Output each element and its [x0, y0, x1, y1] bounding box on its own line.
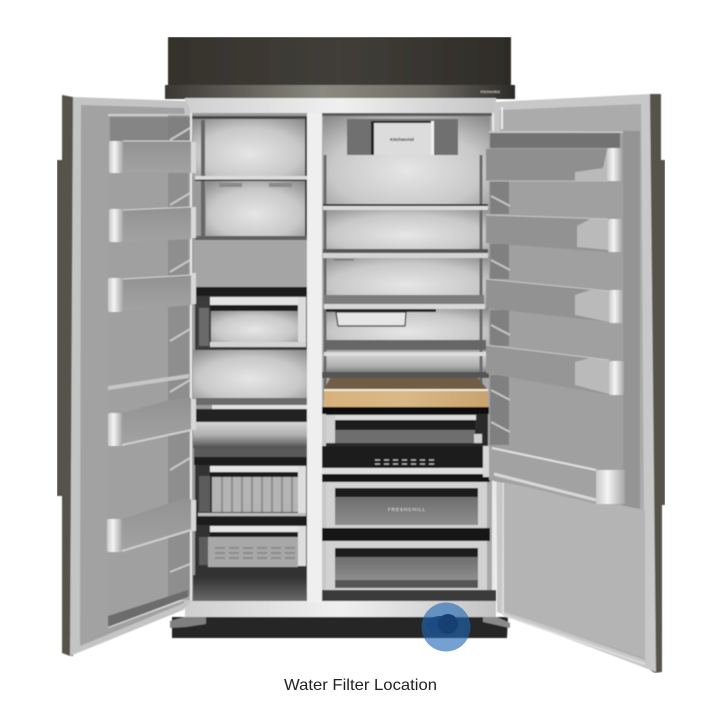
right compartment interior [322, 113, 496, 601]
door bin 2 [109, 207, 196, 242]
drawer two [322, 482, 487, 528]
door bin 4 [486, 345, 624, 395]
door bin 5 [483, 446, 625, 504]
door bin 4 [108, 398, 196, 446]
left door [57, 95, 196, 656]
door bin 2 [486, 215, 622, 252]
shelf four [324, 340, 486, 356]
ice maker module: KitchenAid [390, 137, 414, 142]
shelf racks [325, 155, 481, 400]
wood drawer [324, 378, 488, 407]
drawer one [322, 414, 488, 446]
left door edge [57, 95, 73, 656]
control panel [322, 446, 487, 474]
right door edge [650, 94, 665, 673]
shelf two [323, 249, 488, 260]
drawer two: FRESHCHILL [388, 507, 426, 512]
freezer basket two [195, 525, 307, 575]
door bin 5 [107, 499, 196, 552]
left shelf rack [201, 120, 205, 237]
cabinet frame [185, 98, 496, 618]
water filter highlight [422, 602, 470, 652]
refrigerator illustration [57, 37, 665, 673]
door bin 1 [486, 148, 622, 181]
water filter cap [427, 614, 458, 634]
drawer three [322, 541, 487, 590]
door brackets [490, 180, 509, 445]
freezer basket one [195, 465, 307, 517]
ice maker module [347, 119, 458, 155]
brand logo on top band: KitchenAid [480, 89, 500, 94]
door bin 3 [486, 279, 623, 323]
cabinet top grille [165, 37, 515, 99]
door bin 1 [109, 141, 196, 173]
upper basket drawer [195, 296, 307, 350]
caption: Water Filter Location [284, 677, 437, 694]
shelf three with small drawer [324, 295, 485, 326]
shelf one [323, 204, 488, 210]
door bin 3 [108, 273, 196, 312]
slim door shelf [108, 374, 189, 390]
left compartment interior [192, 113, 307, 601]
lower door panel [502, 482, 645, 658]
toe kick base [170, 617, 510, 638]
upper shelf [195, 176, 307, 181]
right door [483, 94, 665, 673]
middle wire shelf [196, 398, 307, 422]
